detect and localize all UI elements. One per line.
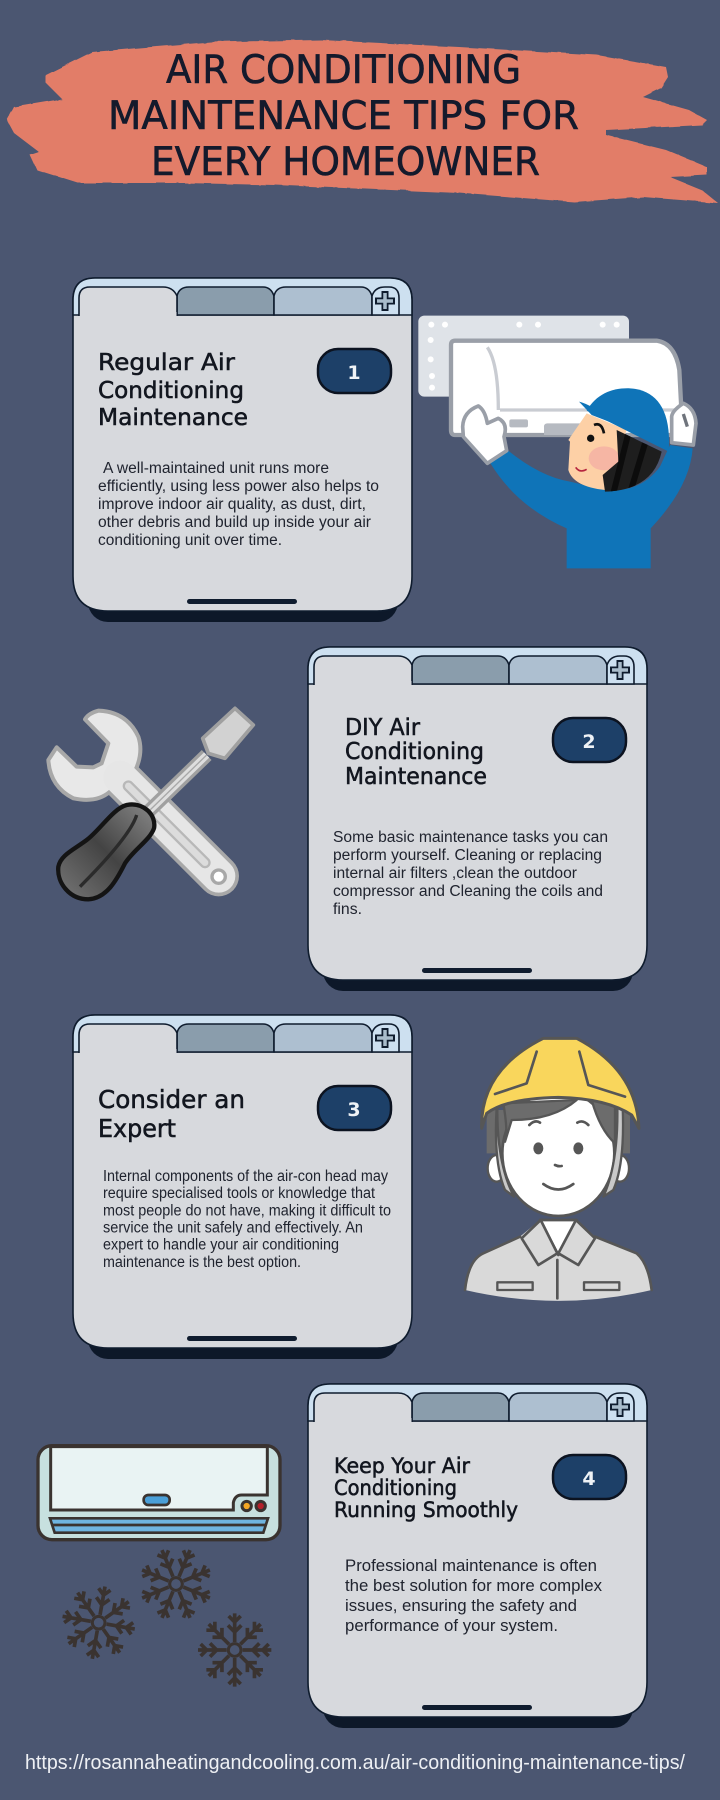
snowflake	[61, 1585, 136, 1660]
icon: air conditioner with snowflakes	[38, 1446, 280, 1687]
title banner	[7, 40, 718, 203]
heading	[98, 1085, 245, 1143]
heading	[334, 1454, 518, 1522]
heading: Maintenance	[98, 405, 248, 431]
card frame	[73, 1015, 412, 1359]
card frame	[308, 647, 647, 991]
snowflake	[198, 1613, 271, 1687]
heading: Consider an	[98, 1085, 245, 1114]
panel: tip 1	[73, 278, 412, 622]
heading: Running Smoothly	[334, 1498, 518, 1522]
heading: Conditioning	[98, 378, 244, 404]
screwdriver	[58, 708, 253, 899]
body text: most people do not have, making it difficult to	[103, 1202, 391, 1220]
number badge: 1	[347, 362, 361, 384]
panel: tip 2	[308, 647, 647, 991]
card frame	[308, 1384, 647, 1728]
number badge: 4	[582, 1468, 596, 1490]
body text	[98, 460, 379, 549]
body text: compressor and Cleaning the coils and	[333, 883, 603, 900]
brush stroke	[7, 40, 718, 203]
heading: DIY Air	[345, 715, 421, 741]
title text: EVERY HOMEOWNER	[151, 140, 540, 185]
panel: tip 4	[308, 1384, 647, 1728]
footer url: https://rosannaheatingandcooling.com.au/air-conditioning-maintenance-tips/	[25, 1752, 685, 1774]
body text: service the unit safely and effectively. An	[103, 1220, 363, 1236]
wrench	[48, 711, 225, 883]
heading	[345, 715, 487, 790]
body text: internal air filters ,clean the outdoor	[333, 865, 577, 882]
body text: improve indoor air quality, as dust, dirt,	[98, 496, 366, 513]
number badge: 3	[347, 1099, 361, 1121]
body text: other debris and build up inside your air	[98, 514, 371, 531]
body text: Professional maintenance is often	[345, 1557, 597, 1575]
body text: require specialised tools or knowledge that	[103, 1185, 376, 1202]
title text	[108, 48, 579, 185]
body text: conditioning unit over time.	[98, 532, 282, 549]
body text: the best solution for more complex	[345, 1577, 603, 1595]
body text: efficiently, using less power also helps to	[98, 478, 379, 495]
number badge	[318, 349, 391, 393]
body text: maintenance is the best option.	[103, 1254, 301, 1271]
title text: MAINTENANCE TIPS FOR	[108, 94, 579, 139]
body text: Internal components of the air-con head may	[103, 1168, 388, 1185]
snowflake	[140, 1548, 212, 1620]
body text: A well-maintained unit runs more	[103, 460, 329, 477]
body text: expert to handle your air conditioning	[103, 1236, 339, 1254]
icon: worker with yellow helmet	[465, 1038, 652, 1301]
number badge	[318, 1086, 391, 1130]
air conditioner unit	[38, 1446, 280, 1540]
heading: Conditioning	[345, 739, 484, 765]
heading: Maintenance	[345, 764, 487, 790]
number badge	[553, 1455, 626, 1499]
icon: wrench and screwdriver	[48, 708, 253, 899]
panel: tip 3	[73, 1015, 412, 1359]
icon: technician installing air conditioner	[418, 316, 696, 568]
body text	[345, 1557, 603, 1635]
body text: performance of your system.	[345, 1617, 558, 1635]
body text	[103, 1168, 391, 1271]
number badge	[553, 718, 626, 762]
body text: perform yourself. Cleaning or replacing	[333, 847, 602, 864]
body text: fins.	[333, 901, 362, 918]
heading: Regular Air	[98, 350, 236, 376]
heading: Keep Your Air	[334, 1454, 470, 1478]
title text: AIR CONDITIONING	[166, 48, 521, 93]
body text	[333, 829, 608, 918]
heading	[98, 350, 248, 431]
body text: Some basic maintenance tasks you can	[333, 829, 608, 846]
number badge: 2	[582, 731, 596, 753]
body text: issues, ensuring the safety and	[345, 1597, 577, 1615]
heading: Expert	[98, 1114, 176, 1143]
heading: Conditioning	[334, 1476, 457, 1500]
card frame	[73, 278, 412, 622]
